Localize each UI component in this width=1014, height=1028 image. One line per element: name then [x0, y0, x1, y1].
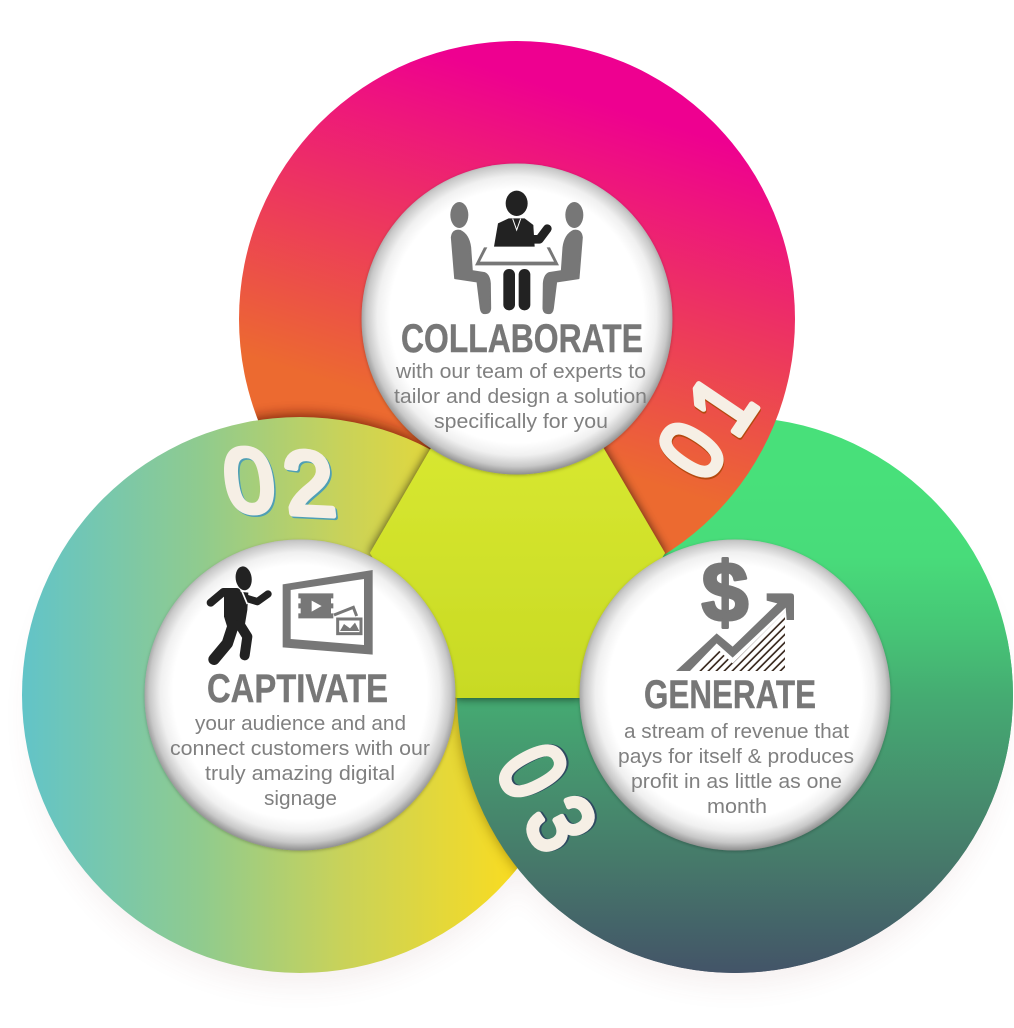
text: captivate description: connect customers with our: [170, 737, 430, 760]
heading: generate: GENERATE: [644, 673, 816, 717]
text: collaborate description: specifically for you: [434, 410, 608, 433]
number 02: 02: [220, 431, 352, 538]
ring: generate (green): [457, 417, 1013, 973]
panel: generate: [580, 540, 890, 850]
panel: captivate: [144, 540, 456, 850]
ring shadow on captivate: [452, 698, 518, 874]
text: generate description: month: [707, 795, 767, 818]
text: generate description: [618, 720, 854, 818]
icon: dollar and growth chart: [676, 557, 794, 671]
number 02: 02: [218, 430, 350, 536]
heading: captivate: CAPTIVATE: [207, 667, 388, 711]
ring: captivate (teal to yellow): [22, 417, 578, 973]
soft ground shadow: [30, 446, 1005, 986]
text: collaborate description: with our team of experts to: [395, 360, 646, 383]
text: captivate description: [170, 712, 430, 810]
number 03: 03: [476, 728, 623, 882]
number 03: 03: [479, 728, 625, 881]
text: collaborate description: tailor and design a solution: [394, 385, 647, 408]
icon: dollar and growth chart: $: [702, 545, 748, 639]
text: generate description: a stream of revenue that: [624, 720, 849, 743]
text: collaborate description: [394, 360, 647, 433]
text: captivate description: signage: [264, 787, 337, 810]
ring overlap: generate over captivate: [457, 640, 1013, 973]
icon: meeting: [450, 191, 583, 313]
number 01: 01: [638, 349, 782, 496]
text: generate description: pays for itself & produces: [618, 745, 854, 768]
ring shadow on collaborate: [254, 406, 430, 450]
number 01: 01: [638, 351, 783, 498]
center hexagon: [370, 300, 665, 698]
text: captivate description: truly amazing digital: [205, 762, 395, 785]
ring: collaborate (magenta): [239, 41, 795, 597]
panel: collaborate: [362, 164, 672, 474]
heading: collaborate: COLLABORATE: [401, 317, 643, 361]
text: captivate description: your audience and and: [195, 712, 406, 735]
icon: running man and screen: [211, 565, 373, 659]
text: generate description: profit in as little as one: [631, 770, 842, 793]
